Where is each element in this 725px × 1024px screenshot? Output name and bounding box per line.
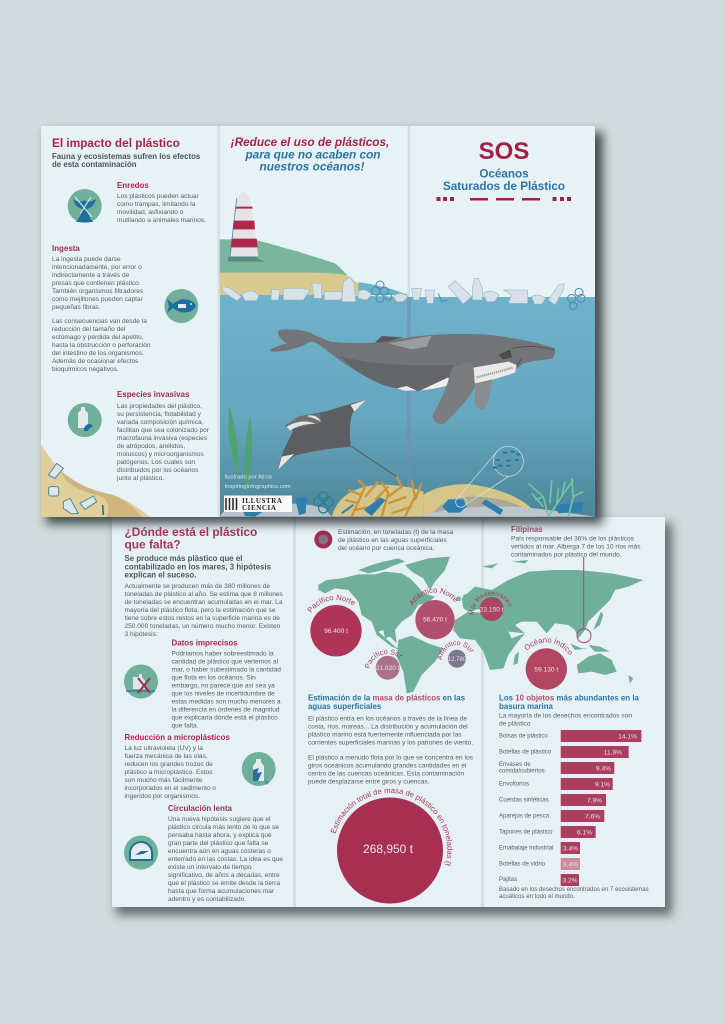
text: slow circulation: Una nueva hipótesis sugiere que el — [168, 816, 271, 823]
bubble: Pacífico Sur: 21.020 t — [376, 665, 400, 672]
chart: total mass circle: Estimación total de masa de plástico en toneladas (t) — [330, 788, 453, 866]
icon: speedometer — [124, 836, 158, 870]
heading: reduce plastic: para que no acaben con — [244, 148, 381, 162]
bar chart: top 10 objects: 7.6% — [585, 814, 600, 820]
text: microplastics: son mucho más fácilmente — [124, 777, 203, 784]
text: introduction: mayoría del plástico flota, pero la estimación que se — [124, 607, 276, 614]
text: invasive species: de atrópodos, anélidos, — [117, 443, 185, 450]
subheading: oceans saturated: Océanos — [479, 168, 529, 180]
heading: slow circulation: Circulación lenta — [168, 804, 233, 813]
text: introduction: toneladas de plástico al año. Se estima que 8 millones — [124, 591, 284, 598]
illustration: hill and shore — [220, 239, 408, 295]
logo: Illustraciencia — [224, 496, 292, 512]
text: chart source: Basado en los desechos encontrados en 7 ecosistemas — [499, 887, 649, 893]
bubble: Mar Mediterráneo: 23.150 t — [480, 606, 504, 614]
bar chart: top 10 objects: Botellas de vidrio — [499, 862, 546, 868]
legend: circle and text: del océano por cuenca oceánica. — [338, 545, 434, 552]
chart: total mass circle — [330, 788, 453, 904]
legend: circle and text — [314, 529, 454, 552]
bubble: Océano Índico — [524, 638, 572, 690]
heading: plastic impact: El impacto del plástico — [52, 136, 180, 150]
bubble: Atlántico Norte: 56.470 t — [423, 616, 447, 624]
bubble: Atlántico Sur — [437, 640, 474, 668]
text: chart intro: La mayoría de los desechos encontrados son — [499, 712, 632, 720]
text: invasive species: variada composición química, — [117, 419, 204, 426]
heading: reduce plastic: nuestros océanos! — [260, 160, 365, 174]
bar chart: top 10 objects: 9.1% — [595, 782, 610, 788]
text: slow circulation: encuentra aún en aguas costeras o — [168, 848, 271, 855]
text: microplastics: fuerza mecánica de las olas, — [124, 753, 208, 760]
bubble: Océano Índico: Océano Índico — [524, 638, 572, 655]
subheading: oceans saturated: Saturados de Plástico — [443, 180, 565, 193]
illustration: floating plastic — [222, 277, 585, 310]
bar chart: top 10 objects: Emabalaje industrial — [499, 846, 553, 852]
heading: where is the missing plastic: ¿Dónde está el plástico — [124, 525, 257, 539]
callout: Philippines: contaminados por plástico del mundo. — [511, 552, 622, 558]
text: invasive species: patógenos. Los cuales son — [117, 459, 195, 466]
bar chart: top 10 objects: 7.9% — [587, 798, 602, 804]
heading: surface mass estimate: aguas superficiales — [308, 702, 382, 711]
bar chart: top 10 objects: 3.2% — [562, 878, 578, 884]
bubble: Pacífico Norte: 96.400 t — [324, 628, 348, 635]
illustration: lighthouse — [228, 192, 265, 262]
subheading: fauna and ecosystems: de esta contaminación — [52, 160, 137, 169]
heading: top 10 objects: basura marina — [499, 702, 554, 711]
text: ingestion: También organismos filtradores — [52, 288, 144, 295]
bar chart: top 10 objects: Envases de — [499, 762, 531, 768]
text: invasive species: macrofauna invasiva (especies — [117, 435, 208, 442]
text: microplastics: reducen los grandes trozos de — [124, 761, 213, 768]
text: ingestion: del intestino de los organismos. — [52, 350, 144, 357]
heading: microplastics: Reducción a microplásticos — [124, 733, 231, 742]
text: surface mass estimate: El plástico entra en los océanos a través de la línea de — [308, 716, 467, 722]
legend: circle and text: de plástico en las aguas superficiales — [338, 537, 447, 544]
bar chart: top 10 objects: 9.4% — [596, 766, 611, 772]
text: surface mass estimate: puede desplazarse entre giros y cuencas. — [308, 778, 430, 786]
text: entanglement: mutilando a animales marinos. — [117, 217, 206, 224]
text: ingestion: como mejillones pueden captar — [52, 296, 144, 303]
text: ingestion: Además de ocasionar efectos — [52, 358, 139, 365]
bar chart: top 10 objects: 11.9% — [604, 750, 622, 756]
text: slow circulation: enterrado en las costas. La idea es que — [168, 856, 283, 863]
heading: invasive species: Especies invasivas — [117, 390, 190, 399]
legend: circle and text: Estimación, en toneladas (t) de la masa — [338, 529, 454, 536]
text: ingestion: pequeñas fibras. — [52, 304, 101, 311]
bubble: Pacífico Sur — [364, 650, 402, 680]
text: slow circulation: pensaba hasta ahora, y explica que — [168, 832, 272, 839]
subheading: three hypotheses: contabilizado en los mares, 3 hipótesis — [124, 562, 272, 571]
text: slow circulation: que el plástico se emite desde la tierra — [168, 880, 280, 887]
text: ingestion: reducción del tamaño del — [52, 326, 126, 333]
icon: fragmenting bottle — [242, 752, 276, 786]
bubble: Mar Mediterráneo: Mar Mediterráneo — [469, 591, 512, 615]
text: chart intro: de plástico — [499, 720, 531, 728]
bubble: Pacífico Sur: Pacífico Sur — [364, 650, 402, 668]
icon: bottle with organism — [68, 403, 102, 437]
text: ingestion: Las consecuencias van desde la — [52, 318, 147, 325]
text: surface mass estimate: centro de las cuencas oceánicas. Esta contaminación — [308, 770, 464, 778]
text: surface mass estimate: giros oceánicos acumulando grandes cantidades en el — [308, 762, 467, 770]
text: entanglement: movilidad, asfixiando o — [117, 209, 184, 216]
text: introduction: Actualmente se producen más de 380 millones de — [124, 583, 270, 590]
illustration: whale — [270, 329, 555, 424]
bar chart: top 10 objects — [499, 730, 641, 886]
panel: upper brochure — [41, 126, 603, 524]
subheading: fauna and ecosystems: Fauna y ecosistemas sufren los efectos — [52, 152, 201, 161]
text: chart source: acuáticos en todo el mundo. — [499, 894, 575, 900]
text: entanglement: Los plásticos pueden actuar — [117, 193, 200, 200]
text: microplastics: La luz ultravioleta (UV) y la — [124, 745, 203, 752]
text: introduction: tiene sobre estos restos en la superficie marina es de — [124, 615, 280, 622]
text: slow circulation: plástico circula más lento de lo que se — [168, 824, 279, 831]
heading: inaccurate data: Datos imprecisos — [172, 638, 238, 648]
text: inaccurate data: cantidad de plástico que vertemos al — [172, 658, 279, 666]
text: invasive species: moluscos) y microorganismos — [117, 451, 205, 458]
text: invasive species: distribuidos por los océanos — [117, 467, 199, 474]
text: invasive species: Las propiedades del plástico, — [117, 403, 202, 410]
sea background — [219, 294, 595, 517]
text: slow circulation: hasta que forma acumulaciones mar — [168, 888, 275, 895]
bubble: Pacífico Norte: Pacífico Norte — [307, 594, 355, 612]
heading: entanglement: Enredos — [117, 181, 149, 190]
marker: Philippines — [577, 557, 591, 643]
text: inaccurate data: que falta. — [172, 722, 199, 730]
icon: crossed bottle — [124, 664, 158, 698]
text: inaccurate data: mar, o haber subestimado la cantidad — [172, 666, 281, 674]
logo: Illustraciencia: ILLUSTRA — [242, 497, 283, 505]
bar chart: top 10 objects: Botellas de plástico — [499, 750, 552, 756]
bubble: Atlántico Norte: Atlántico Norte — [410, 588, 458, 606]
text: inaccurate data: que flota en los océanos. Sin — [172, 674, 256, 682]
subheading: three hypotheses: Se produce más plástico que el — [124, 554, 242, 563]
text: illustrator credit: Ilustrado por Alicia — [224, 474, 273, 480]
text: microplastics: ingeridos por organismos. — [124, 793, 200, 800]
text: ingestion: presas que contienen plástico. — [52, 280, 141, 287]
heading: reduce plastic: ¡Reduce el uso de plásticos, — [231, 135, 389, 149]
bar chart: top 10 objects: comida/cubiertos — [499, 768, 545, 774]
morse code SOS — [436, 197, 571, 201]
bubble: Atlántico Sur: Atlántico Sur — [437, 640, 474, 660]
text: surface mass estimate: plástico marino está fuertemente influenciada por las — [308, 732, 462, 738]
bubble: Atlántico Norte — [410, 588, 458, 640]
heading: surface mass estimate: Estimación de la masa de plásticos en las — [308, 694, 465, 702]
icon: fish with plastic — [164, 289, 198, 323]
bubble: Pacífico Norte — [307, 594, 362, 656]
text: introduction: 3 hipótesis: — [124, 631, 158, 638]
callout: Philippines — [511, 525, 641, 558]
text: ingestion: La ingesta puede darse — [52, 256, 121, 263]
text: slow circulation: adentro y es contabilizado. — [168, 896, 246, 903]
text: surface mass estimate: El plástico a menudo flota por lo que se concentra en los — [308, 754, 474, 762]
text: invasive species: junto al plástico. — [116, 475, 164, 482]
heading: top 10 objects: Los 10 objetos más abundantes en la — [499, 694, 639, 702]
icon: entangled whale tail — [68, 189, 102, 223]
illustration: beach with litter — [41, 445, 150, 517]
text: ingestion: estómago y pérdida del apetito, — [52, 334, 144, 341]
bar chart: top 10 objects: Pajitas — [499, 877, 517, 883]
text: ingestion: indirectamente a través de — [52, 272, 130, 279]
bar chart: top 10 objects: 3.4% — [563, 846, 578, 852]
bar chart: top 10 objects: Aparejos de pesca — [499, 814, 550, 820]
logo: Illustraciencia: CIENCIA — [242, 504, 277, 512]
text: inaccurate data: la diferencia en órdenes de magnitud — [172, 706, 280, 714]
bar chart: top 10 objects: 3.4% — [563, 862, 578, 868]
text: slow circulation: gran parte del plástico que falta se — [168, 840, 269, 847]
bar chart: top 10 objects: Tapones de plástico — [499, 830, 553, 836]
text: entanglement: como trampas, limitando la — [117, 201, 196, 208]
bar chart: top 10 objects: 14.1% — [618, 734, 637, 740]
heading: ingestion: Ingesta — [52, 244, 80, 253]
text: slow circulation: significativo, de años a décadas, entre — [168, 872, 280, 879]
text: ingestion: intencionadamente, por error o — [52, 264, 142, 271]
text: inaccurate data: embargo, no parece que así sea ya — [172, 682, 275, 690]
text: introduction: de toneladas se encuentran acumuladas en el mar. La — [124, 599, 283, 606]
text: introduction: 250.000 toneladas, un número mucho menor. Existen — [124, 623, 281, 630]
text: surface mass estimate: corrientes superficiales marinas y los patrones de viento. — [308, 740, 473, 746]
text: microplastics: incorporados en el sedimento o — [124, 785, 216, 792]
subheading: three hypotheses: explican el suceso. — [124, 571, 196, 580]
text: invasive species: su persistencia, flotabilidad y — [117, 411, 202, 418]
bar chart: top 10 objects: Cuerdas sintéticas — [499, 798, 549, 804]
text: invasive species: facilitan que sea colonizado por — [117, 427, 210, 434]
text: microplastics: plástico a microplástico. Estos — [124, 769, 213, 776]
callout: Philippines: Filipinas — [511, 525, 543, 534]
text: inaccurate data: estas medidas son mucho menores a — [172, 698, 281, 706]
text: slow circulation: existe un intervalo de tiempo — [168, 864, 252, 871]
heading: SOS: SOS — [479, 138, 529, 165]
bubble: Océano Índico: 59.130 t — [534, 666, 558, 674]
text: ingestion: bioquímicos negativos. — [52, 366, 119, 373]
bubble: Atlántico Sur: 12.780 — [448, 657, 467, 663]
text: surface mass estimate: costa, ríos, mareas... La distribución y acumulación del — [308, 724, 468, 730]
text: inaccurate data: que los niveles de incertidumbre de — [172, 690, 275, 698]
bar chart: top 10 objects: Bolsas de plástico — [499, 734, 548, 740]
chart: total mass circle: 268,950 t — [363, 842, 414, 856]
callout: Philippines: País responsable del 36% de los plásticos — [511, 536, 635, 542]
illustration: seabed — [220, 405, 595, 517]
bar chart: top 10 objects: 6.1% — [577, 830, 592, 836]
illustration: manta ray — [278, 400, 397, 477]
bar chart: top 10 objects: Envoltorios — [499, 782, 529, 788]
heading: where is the missing plastic: que falta? — [124, 538, 181, 552]
callout: Philippines: vertidos al mar. Alberga 7 de los 10 ríos más — [511, 544, 641, 550]
text: inaccurate data: Podríamos haber sobreestimado la — [172, 650, 274, 658]
text: ingestion: hasta la obstrucción o perforación — [52, 342, 151, 349]
text: inaccurate data: que explicaría dónde está el plástico — [172, 714, 278, 722]
text: illustrator credit: InspiringInfographics.com — [224, 484, 291, 490]
world map — [318, 557, 643, 693]
